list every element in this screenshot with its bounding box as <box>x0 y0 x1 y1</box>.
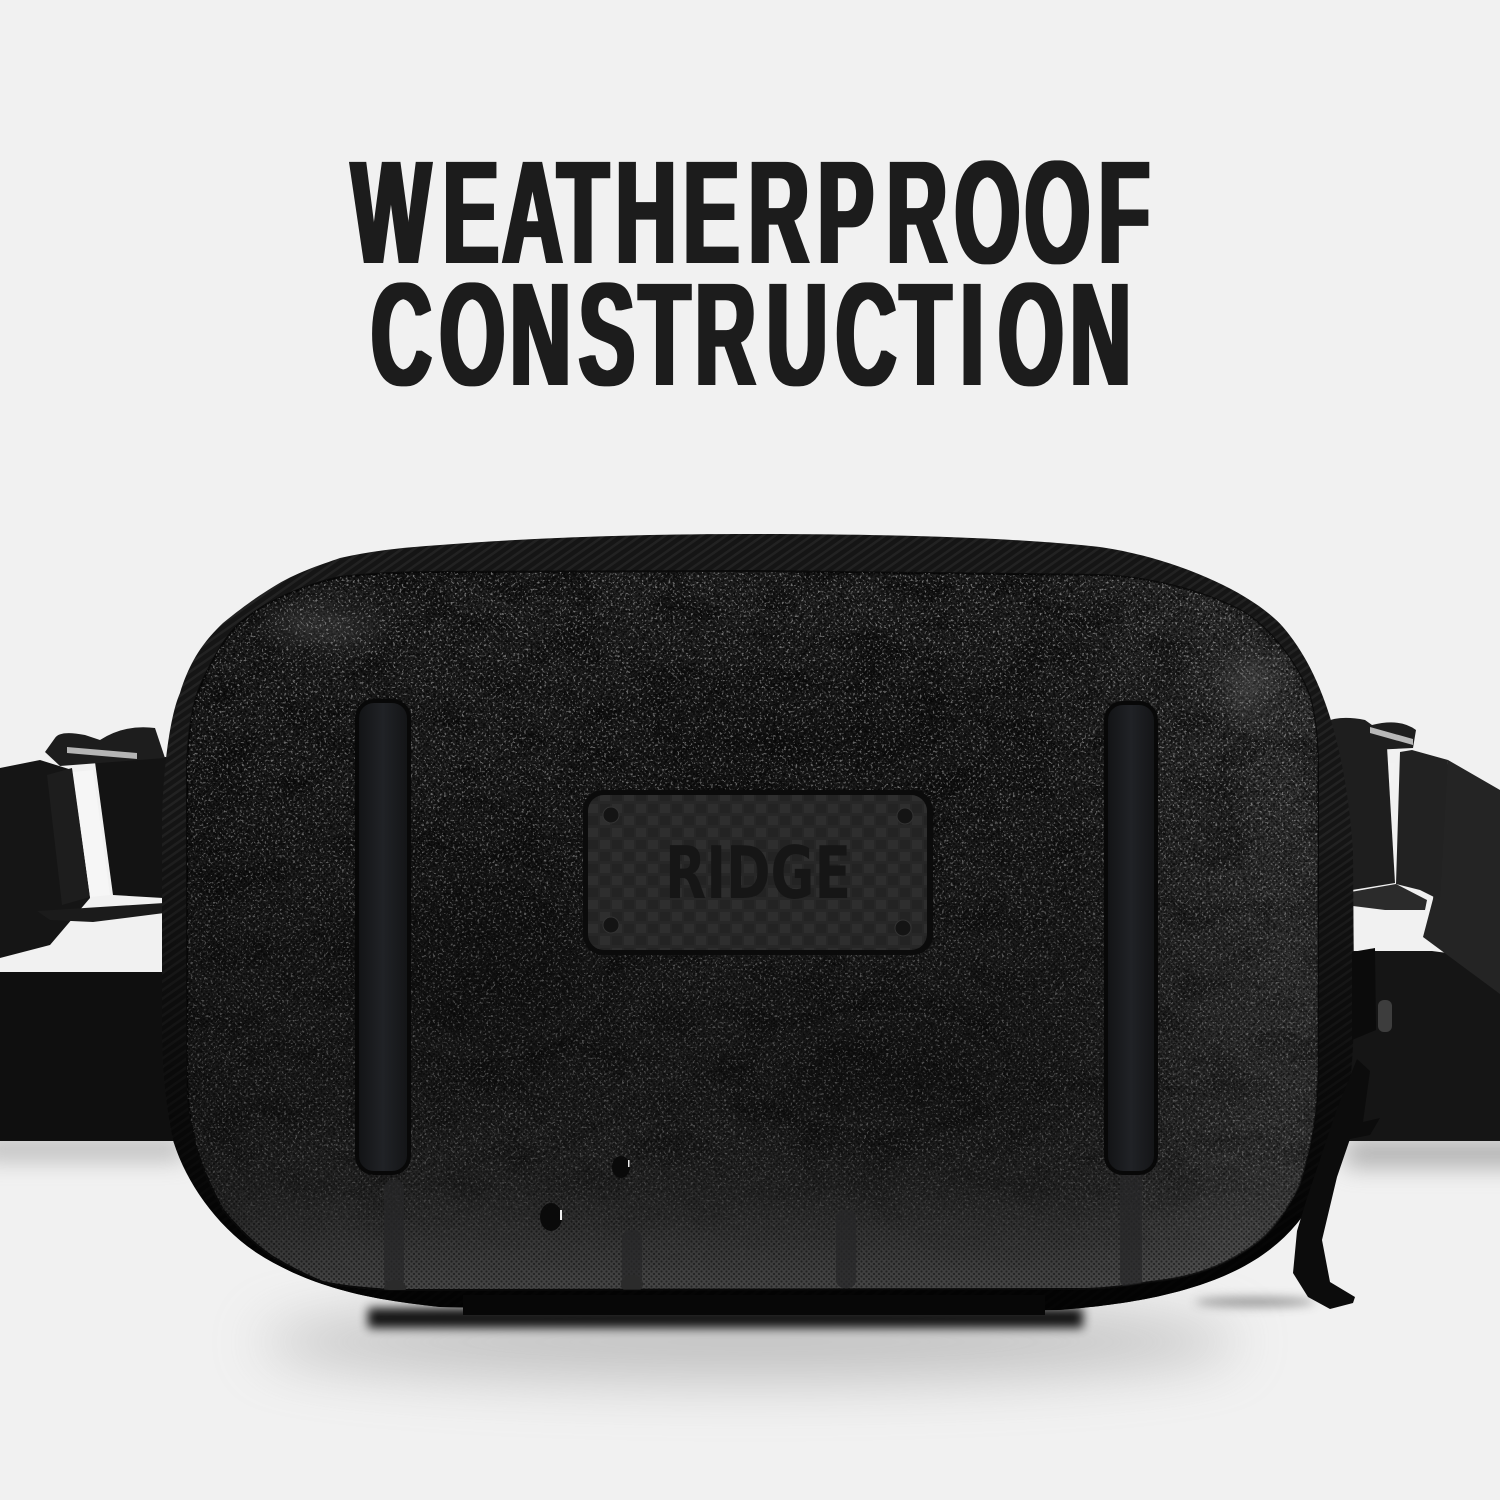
wet blotches <box>218 573 1318 1160</box>
badge screws <box>603 807 913 936</box>
buckle slot right <box>1385 763 1395 803</box>
lower waist strap right <box>1340 951 1500 1141</box>
zipper slider <box>1352 948 1376 1040</box>
buckle slot left <box>73 770 110 897</box>
badge logo: RIDGE <box>665 831 851 915</box>
webbing into bag left <box>95 756 180 899</box>
lower slider bar right <box>1345 884 1427 910</box>
webbing into bag right <box>1325 745 1395 892</box>
loop piece right <box>1396 750 1448 900</box>
left strap and buckle <box>0 727 200 1141</box>
drop glints <box>560 1160 630 1220</box>
zipper glint <box>1378 1000 1392 1032</box>
zipper <box>1293 948 1392 1309</box>
bag fabric rim <box>162 534 1354 1313</box>
metal slider left <box>45 727 165 766</box>
silver bar right <box>1370 727 1413 745</box>
water drops <box>384 1156 643 1296</box>
title line 2: CONSTRUCTION <box>371 254 1131 417</box>
loop piece left <box>47 768 90 905</box>
silver bar left <box>67 747 137 759</box>
side shading <box>1143 580 1318 1283</box>
metal slider right <box>1325 718 1416 752</box>
badge groove <box>583 790 933 955</box>
bag shell <box>187 571 1318 1290</box>
carbon badge <box>583 790 933 955</box>
outer webbing right <box>1423 760 1500 994</box>
title line 1: WEATHERPROOF <box>351 132 1150 295</box>
surface weave <box>187 572 1318 1289</box>
right strap and buckle <box>1325 718 1500 1141</box>
zipper pull <box>1293 1059 1380 1309</box>
left rail <box>357 701 409 1173</box>
dark droplets <box>188 572 1318 1202</box>
title <box>351 132 1150 417</box>
upper webbing left <box>0 760 90 958</box>
right rail <box>1106 703 1156 1173</box>
lower slider bar left <box>37 902 180 922</box>
white specks <box>187 572 1318 1289</box>
bottom patch <box>463 1295 1045 1315</box>
dark wet patches <box>415 740 886 1073</box>
badge plate <box>588 795 927 950</box>
top highlights <box>260 605 1275 719</box>
floor shadow <box>0 1139 1500 1380</box>
bag <box>162 534 1354 1315</box>
lower waist strap left <box>0 972 200 1141</box>
water streaks <box>384 1170 1142 1288</box>
rim lower shading <box>162 820 1354 1313</box>
